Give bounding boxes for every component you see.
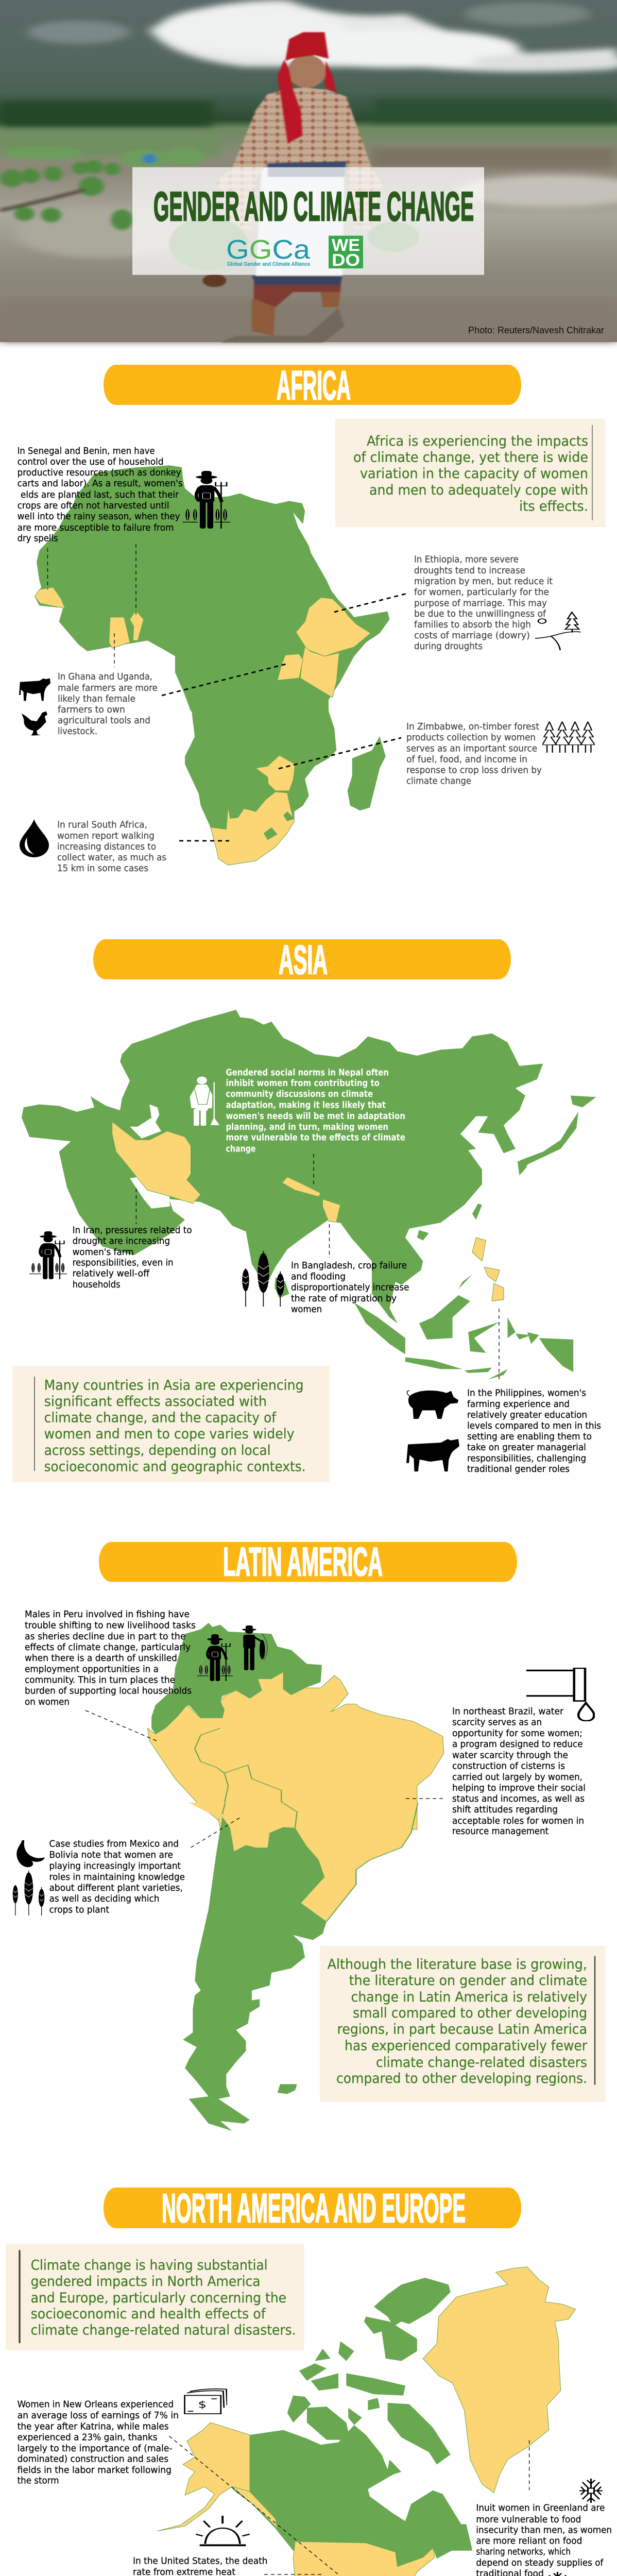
section: Africa (18, 362, 606, 874)
callout: North America and Europe summary: and Europe, particularly concerning the (31, 2290, 286, 2306)
text: Brazil: construction of cisterns is (452, 1761, 565, 1771)
leader lines: Africa (47, 544, 409, 841)
callout: Africa summary: and men to adequately cope with (369, 482, 588, 498)
text: Bangladesh: disproportionately increase (291, 1282, 409, 1293)
map: North America (158, 2267, 576, 2576)
text: Senegal and Benin: well into the rainy season, when they (18, 511, 180, 522)
text: Peru (25, 1609, 196, 1707)
text: Brazil: scarcity serves as an (452, 1717, 542, 1728)
text: Peru: as sheries decline due in part to the (25, 1631, 186, 1642)
text: Greenland: sharing networks, which (476, 2546, 571, 2557)
text: Zimbabwe: In Zimbabwe, on-timber forest (406, 721, 539, 732)
text: New Orleans: an average loss of earnings of 7% in (18, 2410, 179, 2421)
text: New Orleans: largely to the importance of (male- (18, 2443, 173, 2454)
map: Africa (35, 465, 389, 865)
text: Peru: trouble shifting to new livelihood tasks (25, 1620, 196, 1631)
callout: Latin America summary: change in Latin America is relatively (351, 1989, 587, 2005)
text: Philippines: levels compared to men in this (467, 1420, 601, 1431)
callout: Latin America summary: compared to other developing regions. (336, 2071, 587, 2087)
text: Zimbabwe: serves as an important source (406, 743, 537, 754)
text: Mexico and Bolivia: Case studies from Mexico and (49, 1838, 179, 1850)
text: Ethiopia: In Ethiopia, more severe (414, 554, 519, 565)
text: Philippines: farming experience and (467, 1399, 570, 1410)
text: Iran: women's farm (73, 1247, 134, 1258)
callout: Africa summary: variation in the capacity of women (360, 466, 588, 482)
text: Greenland: insecurity than men, as women (476, 2524, 612, 2536)
text: Bangladesh: In Bangladesh, crop failure (291, 1260, 407, 1271)
hero photo: woman in rice paddy (0, 0, 617, 343)
text: Ethiopia: purpose of marriage. This may (414, 598, 547, 609)
icon: cow (406, 1439, 459, 1471)
text: Ghana and Uganda: In Ghana and Uganda, (58, 671, 152, 682)
text: New Orleans: the storm (18, 2475, 59, 2486)
text: Peru: burden of supporting local households (25, 1686, 192, 1696)
icon: faucet (526, 1668, 594, 1721)
text: Senegal and Benin (18, 446, 183, 544)
text: Peru: Males in Peru involved in fishing have (25, 1609, 190, 1620)
text: Nepal: women's needs will be met in adaptation (226, 1111, 405, 1122)
icon: rooster (22, 711, 47, 736)
text: Iran (73, 1225, 192, 1290)
text: Brazil: opportunity for some women; (452, 1728, 582, 1739)
icon: pig (407, 1391, 458, 1419)
icon: snowflake (579, 2479, 603, 2503)
icon: woman with broom (190, 1077, 219, 1126)
text: Iran: drought are increasing (73, 1235, 170, 1247)
callout: Africa summary: Africa is experiencing the impacts (367, 433, 588, 449)
text: Greenland: Inuit women in Greenland are (476, 2503, 605, 2513)
text: South Africa: 15 km in some cases (57, 863, 148, 874)
map: Latin America (147, 1623, 444, 2131)
text: Zimbabwe: products collection by women (406, 732, 536, 743)
text: Peru: effects of climate change, particularly (25, 1642, 191, 1653)
icon: wheat (242, 1251, 284, 1307)
text: Iran: relatively well-off (73, 1268, 150, 1279)
text: Brazil: a program designed to reduce (452, 1739, 583, 1750)
heading: Africa (104, 362, 521, 408)
callout: Asia summary: women and men to cope varies widely (44, 1426, 295, 1442)
text: Zimbabwe (406, 721, 542, 786)
text: Bangladesh: and flooding (291, 1272, 346, 1282)
text: Ghana and Uganda (58, 671, 158, 737)
text: Nepal: planning, and in turn, making women (226, 1122, 388, 1132)
text: Zimbabwe: response to crop loss driven by (406, 765, 542, 776)
callout: North America and Europe summary: socioeconomic and health effects of (31, 2306, 266, 2322)
callout: Asia summary: Many countries in Asia are experiencing (44, 1378, 304, 1393)
section: Asia (12, 937, 601, 1482)
text: Senegal and Benin: crops are often not harvested until (18, 500, 169, 511)
photo credit: Photo: Reuters/Navesh Chitrakar (468, 325, 604, 335)
icon: money (185, 2389, 227, 2414)
text: Ethiopia: for women, particularly for the (414, 587, 549, 598)
text: South Africa: collect water, as much as (57, 852, 166, 863)
callout: Latin America summary (320, 1946, 606, 2102)
text: Senegal and Benin: elds are planted last, such that their (21, 489, 179, 500)
text: Iran: In Iran, pressures related to (73, 1225, 192, 1235)
icon: cow (19, 679, 50, 701)
logo: WEDO: DO (332, 250, 360, 269)
text: Ghana and Uganda: farmers to own (58, 704, 125, 715)
logo: GGCA: GGCa (226, 235, 310, 265)
text: Philippines: In the Philippines, women's (467, 1388, 586, 1398)
heading: Asia (93, 937, 511, 982)
text: Greenland: depend on steady supplies of (476, 2557, 604, 2568)
icon: snowflake (546, 2572, 569, 2576)
text: Nepal: community discussions on climate (226, 1089, 373, 1099)
text: Greenland: are more reliant on food (476, 2536, 582, 2546)
callout: Asia summary: significant effects associated with (44, 1394, 267, 1410)
text: Senegal and Benin: productive resources (such as donkey (18, 467, 181, 478)
text: Mexico and Bolivia: as well as deciding which (49, 1893, 160, 1904)
text: Iran: responsibilities, even in (73, 1257, 174, 1268)
text: Bangladesh (291, 1260, 409, 1315)
text: Greenland (476, 2503, 612, 2576)
text: Brazil: helping to improve their social (452, 1783, 586, 1793)
text: United States (133, 2555, 268, 2576)
text: New Orleans: the year after Katrina, while males (18, 2421, 169, 2432)
text: Ethiopia: be due to the unwillingness of (414, 608, 546, 619)
icon: banana (16, 1840, 45, 1867)
heading: Latin America (99, 1539, 517, 1584)
title panel (132, 167, 484, 275)
text: Zimbabwe: climate change (406, 776, 471, 786)
text: Mexico and Bolivia: crops to plant (49, 1904, 109, 1916)
text: Mexico and Bolivia: playing increasingly important (49, 1861, 181, 1871)
callout: North America and Europe summary: climate change-related natural disasters. (31, 2323, 296, 2338)
callout: Latin America summary: Although the literature base is growing, (328, 1957, 587, 1972)
text: Ethiopia: migration by men, but reduce it (414, 576, 553, 587)
text: Peru: on women (25, 1697, 70, 1707)
text: Senegal and Benin: control over the use of household (18, 456, 164, 467)
leader lines: Latin America (85, 1710, 443, 1848)
text: Senegal and Benin: are more susceptible to failure from (18, 522, 174, 533)
text: Brazil (452, 1706, 586, 1837)
callout: Latin America summary: regions, in part because Latin America (337, 2022, 587, 2037)
heading: Africa: AFRICA (277, 362, 351, 408)
icon: water drop (20, 819, 49, 857)
section: Latin America (13, 1539, 606, 2131)
map: Asia (22, 1010, 596, 1380)
icon: tree on hill (535, 612, 581, 650)
text: New Orleans: experienced a 23% gain, thanks (18, 2432, 158, 2443)
text: Philippines: setting are enabling them to (467, 1431, 592, 1442)
callout: Latin America summary: climate change-related disasters (376, 2055, 587, 2071)
text: Peru: employment opportunities in a (25, 1664, 159, 1674)
text: Nepal: change (226, 1144, 256, 1154)
text: United States: In the United States, the death (133, 2555, 268, 2567)
text: Brazil: In northeast Brazil, water (452, 1706, 563, 1717)
callout: Asia summary: across settings, depending on local (44, 1443, 271, 1459)
text: New Orleans (18, 2399, 179, 2486)
callout: Latin America summary: has experienced comparatively fewer (345, 2038, 587, 2054)
text: Mexico and Bolivia: about different plant varieties, (49, 1883, 183, 1893)
text: Ghana and Uganda: likely than female (58, 693, 135, 704)
text: Bangladesh: the rate of migration by (291, 1293, 397, 1304)
icon: sun (196, 2516, 250, 2545)
text: Peru: community. This in turn places the (25, 1674, 175, 1686)
text: Ethiopia: droughts tend to increase (414, 565, 525, 576)
text: Philippines: responsibilities, challenging (467, 1453, 586, 1464)
text: South Africa (57, 819, 166, 874)
text: Ghana and Uganda: agricultural tools and (58, 715, 150, 726)
text: New Orleans: dominated) construction and sales (18, 2453, 168, 2465)
text: Zimbabwe: of fuel, food, and income in (406, 754, 527, 765)
text: Ethiopia (414, 554, 553, 652)
text: Ethiopia: during droughts (414, 641, 483, 652)
text: Philippines: take on greater managerial (467, 1442, 586, 1453)
text: Senegal and Benin: In Senegal and Benin, men have (18, 446, 155, 456)
callout: Asia summary: climate change, and the capacity of (44, 1410, 277, 1426)
callout: Africa summary (335, 419, 606, 527)
text: Mexico and Bolivia (49, 1838, 185, 1916)
text: Senegal and Benin: dry spells (18, 533, 58, 544)
icon: wheat (13, 1871, 44, 1916)
text: Ethiopia: families to absorb the high (414, 619, 531, 630)
text: Senegal and Benin: carts and labor). As a result, women's (18, 478, 183, 489)
text: Philippines (467, 1388, 601, 1475)
text: Nepal: Gendered social norms in Nepal often (226, 1067, 389, 1078)
text: Brazil: resource management (452, 1826, 549, 1837)
text: Philippines: traditional gender roles (467, 1464, 570, 1475)
icon: farmer (197, 1634, 233, 1681)
icon: farmer (183, 471, 230, 529)
text: New Orleans: fields in the labor market following (18, 2465, 172, 2476)
text: Brazil: acceptable roles for women in (452, 1816, 584, 1826)
callout: Africa summary: of climate change, yet there is wide (353, 449, 588, 466)
logo: GGCA: Global Gender and Climate Alliance (227, 261, 310, 267)
text: Mexico and Bolivia: Bolivia note that women are (49, 1850, 173, 1860)
text: Nepal (226, 1067, 405, 1154)
section: North America and Europe (6, 2185, 612, 2576)
callout: Latin America summary: small compared to other developing (353, 2005, 587, 2021)
callout: North America and Europe summary: Climate change is having substantial (31, 2258, 268, 2273)
text: Mexico and Bolivia: roles in maintaining knowledge (49, 1872, 185, 1883)
text: Brazil: status and incomes, as well as (452, 1793, 585, 1804)
text: Nepal: inhibit women from contributing to (226, 1078, 380, 1089)
text: New Orleans: Women in New Orleans experienced (18, 2399, 174, 2410)
text: Ethiopia: costs of marriage (dowry) (414, 630, 530, 641)
text: South Africa: women report walking (57, 831, 155, 841)
logo: WEDO (329, 235, 363, 269)
text: South Africa: In rural South Africa, (57, 819, 147, 831)
leader lines: North America (169, 2436, 529, 2576)
text: Brazil: water scarcity through the (452, 1750, 568, 1761)
text: Philippines: relatively greater education (467, 1410, 587, 1420)
text: Peru: when there is a dearth of unskilled (25, 1653, 177, 1664)
text: Nepal: more vulnerable to the effects of climate (226, 1132, 405, 1143)
heading: Asia: ASIA (279, 937, 328, 982)
callout: Asia summary (12, 1366, 330, 1482)
callout: Africa summary: its effects. (519, 499, 588, 514)
leader lines: Asia (136, 1154, 499, 1382)
text: South Africa: increasing distances to (57, 841, 156, 852)
text: Ghana and Uganda: male farmers are more (58, 683, 158, 693)
text: Bangladesh: women (291, 1304, 322, 1315)
text: Ghana and Uganda: livestock. (58, 726, 97, 737)
text: Brazil: carried out largely by women, (452, 1772, 582, 1783)
text: Nepal: adaptation, making it less likely that (226, 1099, 386, 1111)
text: Greenland: more vulnerable to food (476, 2514, 581, 2525)
text: Iran: households (73, 1279, 121, 1290)
callout: Latin America summary: the literature on gender and climate (349, 1973, 587, 1989)
callout: Asia summary: socioeconomic and geographic contexts. (44, 1459, 306, 1475)
heading: Latin America: LATIN AMERICA (223, 1539, 383, 1584)
text: Brazil: shift attitudes regarding (452, 1804, 558, 1815)
logo: WEDO: WE (332, 235, 360, 255)
callout: North America and Europe summary: gendered impacts in North America (31, 2274, 261, 2290)
icon: forest (542, 722, 595, 753)
callout: North America and Europe summary (6, 2244, 304, 2350)
icon: fisher (242, 1625, 267, 1670)
icon: woman farmer (29, 1231, 67, 1279)
